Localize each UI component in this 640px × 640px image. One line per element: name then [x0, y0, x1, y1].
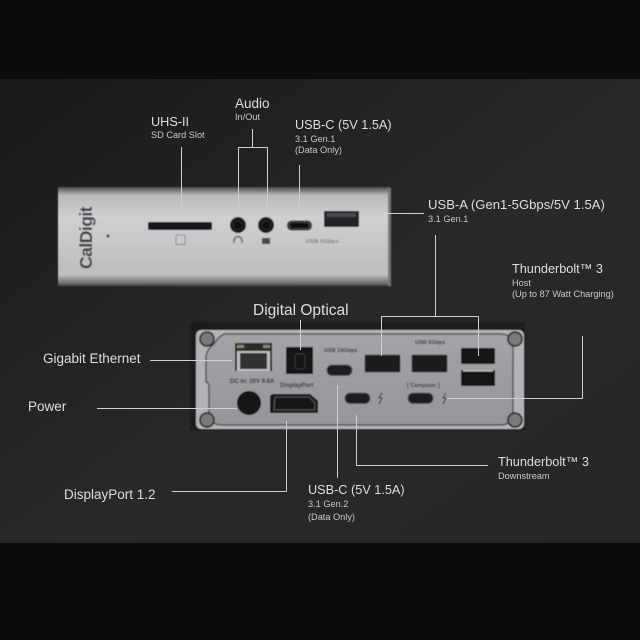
label: USB-C front: (Data Only): [295, 145, 342, 155]
logo: CalDigit: CalDigit: [76, 206, 96, 269]
faceplate: [196, 330, 524, 429]
screws: [200, 332, 522, 427]
status LED: [106, 234, 110, 238]
label: UHS-II: [151, 115, 205, 140]
label: USB-A: USB-A (Gen1-5Gbps/5V 1.5A): [428, 197, 605, 212]
Ethernet port: [235, 343, 272, 371]
headphone jack: [230, 217, 246, 243]
label: Audio: In/Out: [235, 112, 260, 122]
DisplayPort marking: DisplayPort: [280, 383, 313, 389]
label: DisplayPort 1.2: DisplayPort 1.2: [64, 487, 156, 502]
label: USB-C rear: USB-C (5V 1.5A): [308, 483, 405, 497]
microphone jack: [258, 217, 274, 244]
power socket: [237, 391, 261, 415]
label: Power: Power: [28, 399, 67, 414]
USB-A ports: [365, 348, 495, 386]
icon: SD card: [176, 235, 185, 244]
label: UHS-II: SD Card Slot: [151, 130, 205, 140]
label: Thunderbolt 3 host: [512, 262, 614, 299]
rear view of dock: [190, 322, 525, 430]
label: Digital Optical: Digital Optical: [253, 302, 349, 319]
power label: DC in: 20V 9.6A: [230, 379, 275, 385]
label: Audio: Audio: [235, 96, 270, 111]
DisplayPort socket: [270, 394, 318, 413]
front view of dock: [58, 187, 391, 287]
label: USB-C front: USB-C (5V 1.5A): [295, 118, 392, 132]
label: Thunderbolt 3 host: (Up to 87 Watt Charging): [512, 289, 614, 299]
Computer marking: [ Computer ]: [407, 383, 440, 389]
Thunderbolt port host: [408, 393, 446, 404]
label: Thunderbolt 3 downstream: Thunderbolt™ 3: [498, 455, 589, 469]
label: UHS-II: UHS-II: [151, 115, 189, 129]
label: USB-C rear: (Data Only): [308, 512, 355, 522]
label: Thunderbolt 3 host: Host: [512, 278, 531, 288]
USB 5Gbps marking: USB 5Gbps: [306, 239, 339, 245]
USB 5Gbps marking rear: USB 5Gbps: [415, 340, 445, 346]
USB-C port: [287, 220, 312, 230]
label: USB-A: [428, 197, 605, 224]
Thunderbolt port downstream: [345, 393, 382, 404]
USB 10Gbps marking: USB 10Gbps: [324, 348, 357, 354]
label: USB-C rear: [308, 483, 405, 522]
label: Audio: [235, 96, 270, 122]
label: USB-A: 3.1 Gen.1: [428, 214, 468, 224]
label: USB-C front: 3.1 Gen.1: [295, 134, 335, 144]
connector lines: [97, 129, 582, 492]
label: Thunderbolt 3 downstream: [498, 455, 589, 481]
label: Thunderbolt 3 downstream: Downstream: [498, 471, 550, 481]
USB-A port: [324, 211, 359, 227]
SD card slot: [148, 222, 212, 230]
label: Thunderbolt 3 host: Thunderbolt™ 3: [512, 262, 603, 276]
label: Gigabit Ethernet: Gigabit Ethernet: [43, 351, 141, 366]
USB-C 10Gbps port: [327, 365, 352, 376]
label: USB-C front: [295, 118, 392, 155]
label: USB-C rear: 3.1 Gen.2: [308, 499, 348, 509]
optical port: [286, 347, 313, 374]
background band: [0, 79, 640, 543]
